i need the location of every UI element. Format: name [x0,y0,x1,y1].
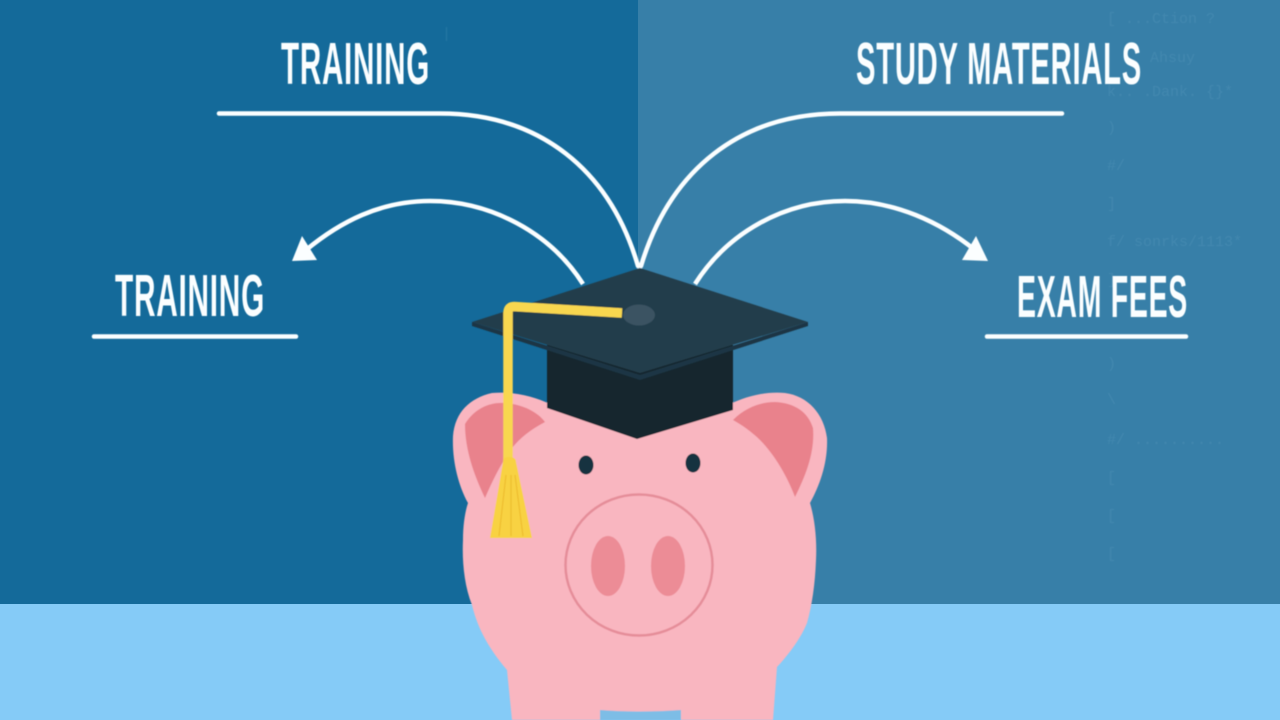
arrow: top left line [219,114,638,266]
faint code text: [ [1107,470,1116,487]
faint code text: #/ .......... [1107,432,1224,449]
tassel cord [508,306,622,462]
faint code text: ) [1107,120,1116,137]
arrow: to lower left training [292,201,583,284]
heading: top left training: TRAINING [281,31,430,97]
panel: floor [0,604,1280,720]
leg gap [600,710,681,720]
cap button [623,304,655,326]
nostrils [591,536,685,596]
cap board [472,268,808,373]
heading: lower left training: TRAINING [115,263,265,329]
right inner ear [733,402,813,497]
panel: left background [0,0,638,604]
cap board edge [472,322,808,380]
left inner ear [465,403,545,498]
faint code text: [ [1107,546,1116,563]
pig body [453,393,827,720]
faint code text: ] [1107,272,1116,289]
faint code text [442,11,1242,563]
arrow: top right line [641,114,1062,266]
faint code text: [ [1107,508,1116,525]
underline: lower right [987,334,1186,339]
faint code text: \ [1107,392,1116,409]
faint code text: Ahsuy [1150,50,1195,67]
tassel [490,457,532,538]
panel: right background [638,0,1280,604]
faint code text: f/ sonrks/1113* [1107,234,1242,251]
arrow: to exam fees [695,201,988,284]
faint code text: | [442,26,451,43]
faint code text: k.. .Dank. {}* [1107,84,1233,101]
cap base [547,345,733,439]
piggy bank [453,393,827,720]
eyes [578,454,700,474]
underline: lower left [94,334,296,339]
snout [566,494,712,636]
faint code text: ) [1107,356,1116,373]
faint code text: #/ [1107,158,1125,175]
faint code text: [ ...Ction ? [1107,11,1215,28]
faint code text: ] [1107,196,1116,213]
graduation cap [472,268,808,538]
